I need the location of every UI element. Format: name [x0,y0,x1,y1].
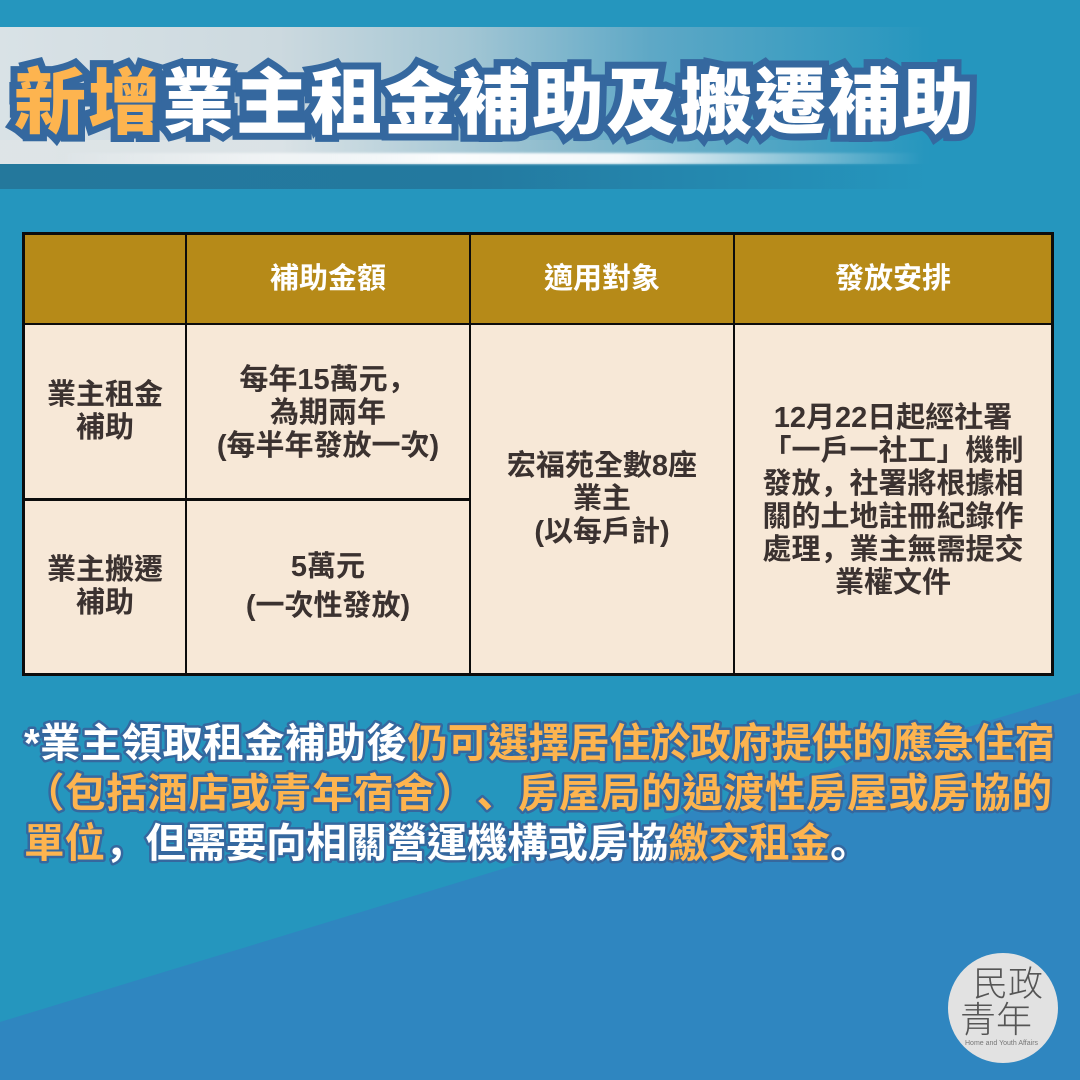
rent subsidy amount [187,325,469,498]
relocation subsidy amount [187,501,469,673]
table [22,232,1054,676]
logo: 青年 [960,991,1032,1043]
header cell: arrangement: 發放安排 [835,262,951,294]
target cell: 業主 [573,483,631,515]
header cell: amount: 補助金額 [270,262,386,294]
rent subsidy amount: (每半年發放一次) [217,430,439,462]
logo: Home and Youth Affairs [965,1040,1039,1047]
arrangement cell [735,325,1051,673]
row label: rent subsidy: 補助 [76,412,134,444]
row label: rent subsidy [25,325,185,498]
footnote text: *業主領取租金補助後仍可選擇居住於政府提供的應急住宿 [24,720,1054,766]
arrangement cell: 關的土地註冊紀錄作 [762,500,1024,532]
footnote text: 單位，但需要向相關營運機構或房協繳交租金。 [24,810,871,869]
logo [948,953,1058,1063]
header cell: empty [25,235,185,323]
relocation subsidy amount: (一次性發放) [246,590,410,622]
row label: relocation subsidy: 業主搬遷 [47,554,163,586]
row label: relocation subsidy [25,501,185,673]
arrangement cell: 發放，社署將根據相 [762,460,1024,502]
logo: 民政 [973,956,1043,1007]
arrangement cell: 業權文件 [835,566,951,598]
header cell: target: 適用對象 [544,262,660,294]
arrangement cell: 處理，業主無需提交 [762,526,1024,568]
title: 新增業主租金補助及搬遷補助 [14,64,976,144]
arrangement cell: 12月22日起經社署 [774,402,1012,434]
rent subsidy amount: 每年15萬元， [239,356,417,398]
header cell: arrangement [735,235,1051,323]
row label: relocation subsidy: 補助 [76,587,134,619]
target cell: 宏福苑全數8座 [507,450,697,482]
rent subsidy amount: 為期兩年 [270,397,386,429]
header cell: target [471,235,733,323]
relocation subsidy amount: 5萬元 [291,551,365,583]
footnote text: （包括酒店或青年宿舍）、房屋局的過渡性房屋或房協的 [24,760,1053,819]
footnote text [22,719,1055,869]
row label: rent subsidy: 業主租金 [47,378,163,410]
target cell [471,325,733,673]
header cell: amount [187,235,469,323]
target cell: (以每戶計) [534,516,670,548]
arrangement cell: 「一戶一社工」機制 [762,426,1024,468]
